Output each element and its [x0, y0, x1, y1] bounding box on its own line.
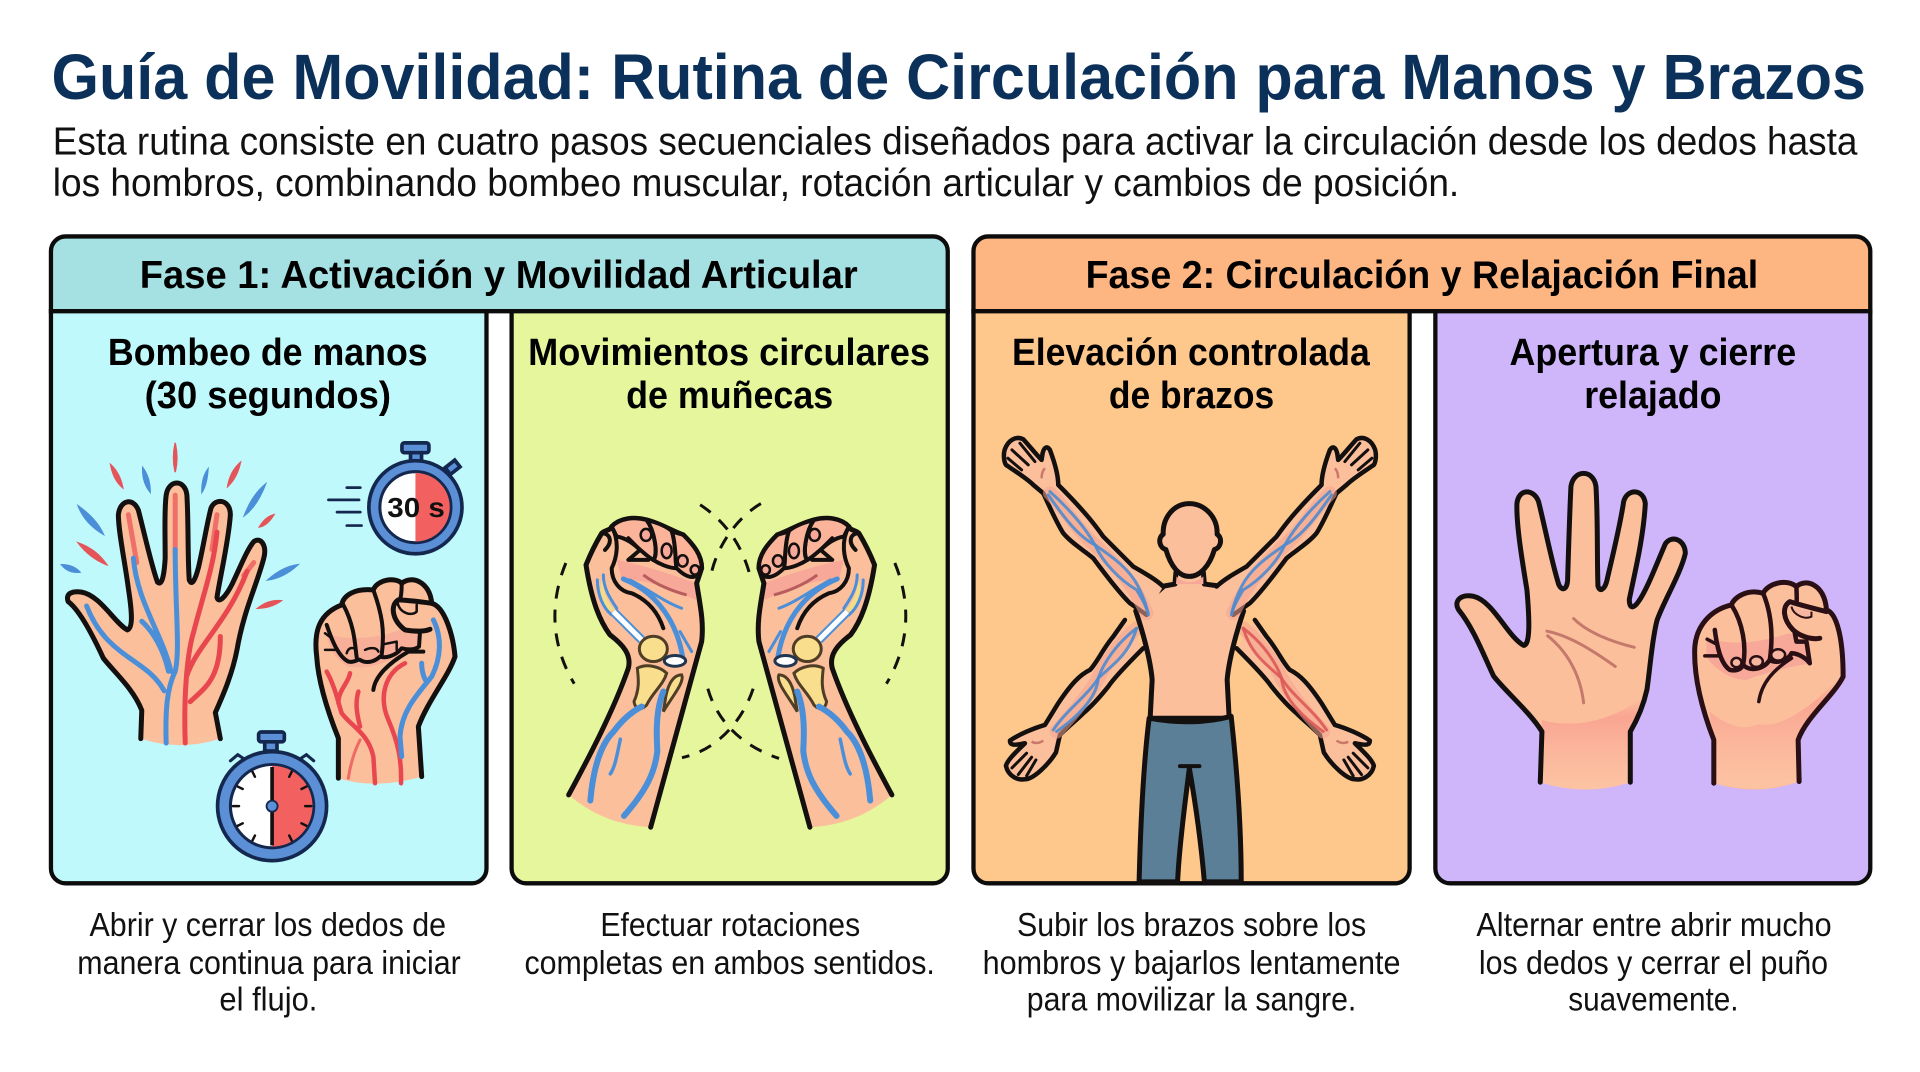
fase 1 header	[51, 236, 948, 311]
description: apertura: suavemente.	[1568, 982, 1739, 1019]
step card: muñecas	[512, 311, 948, 883]
step title	[528, 332, 930, 417]
description: bombeo	[77, 907, 461, 1019]
step title	[1012, 332, 1371, 417]
description: elevación: Subir los brazos sobre los	[1017, 907, 1366, 944]
icon: relaxed closed fist	[1695, 582, 1843, 790]
step title: Bombeo de manos	[108, 332, 428, 374]
step card: bombeo de manos	[51, 311, 486, 883]
description: bombeo: el flujo.	[219, 982, 317, 1019]
intro text: Esta rutina consiste en cuatro pasos secuenciales diseñados para activar la circulación desde los dedos hasta	[53, 120, 1858, 163]
description: apertura: los dedos y cerrar el puño	[1479, 945, 1828, 982]
step title: Elevación controlada	[1012, 332, 1371, 374]
icon: stopwatch dial	[218, 732, 327, 861]
upper right arm	[1217, 438, 1376, 615]
intro text	[53, 120, 1858, 205]
icon: clenched fist with veins	[316, 580, 455, 784]
icon: left wrist	[569, 518, 702, 827]
fase 1 header: Fase 1: Activación y Movilidad Articular	[140, 254, 858, 297]
description: muñecas	[524, 907, 935, 982]
panel: fase 2	[973, 236, 1870, 883]
fase 2 header	[973, 236, 1870, 311]
icon: right wrist	[758, 518, 892, 827]
step title: Movimientos circulares	[528, 332, 930, 374]
upper left arm	[1004, 438, 1163, 615]
step title: de muñecas	[626, 375, 833, 417]
description: muñecas: Efectuar rotaciones	[600, 907, 860, 944]
description: bombeo: Abrir y cerrar los dedos de	[90, 907, 446, 944]
description: apertura: Alternar entre abrir mucho	[1476, 907, 1832, 944]
description: bombeo: manera continua para iniciar	[77, 945, 461, 982]
fase 2 header: Fase 2: Circulación y Relajación Final	[1086, 254, 1758, 297]
intro text: los hombros, combinando bombeo muscular, rotación articular y cambios de posición.	[53, 162, 1459, 205]
description: elevación: hombros y bajarlos lentamente	[983, 945, 1400, 982]
step title: relajado	[1584, 375, 1721, 417]
step title	[108, 332, 428, 417]
panel: fase 1	[51, 236, 948, 883]
step card: apertura y cierre	[1435, 311, 1870, 883]
icon: stopwatch 30 s: 30 s	[387, 491, 445, 523]
step title: de brazos	[1109, 375, 1274, 417]
step card: elevación de brazos	[973, 311, 1410, 883]
icon: stopwatch 30 s	[328, 443, 462, 554]
description: elevación	[983, 907, 1400, 1019]
description: apertura	[1476, 907, 1832, 1019]
icon: rotation arcs	[555, 504, 906, 758]
lower right arm	[1237, 620, 1374, 779]
title: Guía de Movilidad: Rutina de Circulación para Manos y Brazos	[52, 42, 1866, 113]
step title	[1509, 332, 1796, 417]
pants	[1139, 716, 1241, 882]
step title: (30 segundos)	[145, 375, 391, 417]
lower left arm	[1006, 620, 1143, 779]
torso and head	[1136, 504, 1244, 882]
icon: open relaxed hand	[1457, 473, 1685, 789]
icon: open hand with veins	[62, 443, 298, 745]
description: elevación: para movilizar la sangre.	[1027, 982, 1356, 1019]
step title: Apertura y cierre	[1509, 332, 1796, 374]
description: muñecas: completas en ambos sentidos.	[524, 945, 935, 982]
icon: figure with arms moving	[1004, 438, 1376, 882]
